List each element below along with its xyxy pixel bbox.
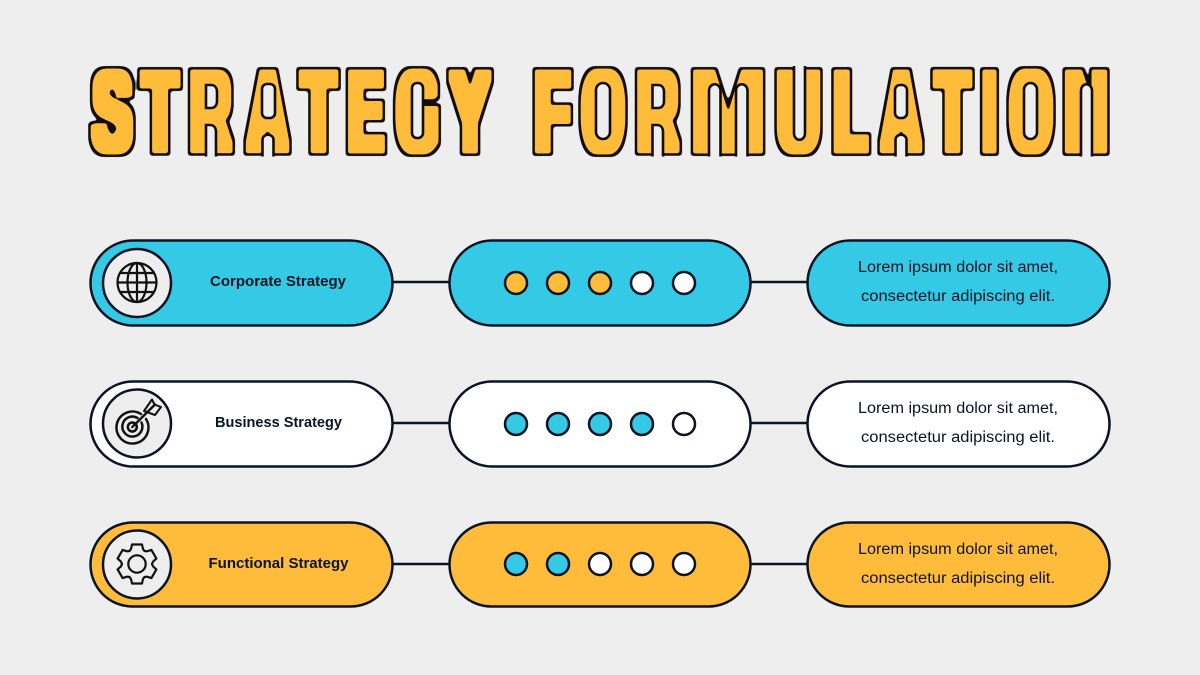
title: A [251, 52, 284, 171]
panel: corporate strategy label [90, 240, 392, 326]
title: U [778, 53, 819, 172]
title: E [350, 54, 381, 171]
panel: corporate description: consectetur adipiscing elit. [861, 288, 1055, 305]
title: T [303, 52, 334, 171]
panel: business rating dots [450, 382, 750, 466]
panel: functional strategy label: Functional Strategy [208, 555, 349, 572]
title: Y [453, 53, 487, 171]
title: T [937, 52, 968, 171]
title: R [638, 52, 677, 171]
icon: target with dart [116, 400, 161, 444]
title: N [1066, 52, 1106, 170]
icon: globe [118, 263, 156, 302]
panel: corporate strategy label: Corporate Strategy [210, 273, 347, 290]
row 2: business strategy [90, 382, 1110, 466]
panel: corporate rating dots [450, 240, 750, 326]
row 3: functional strategy [90, 522, 1110, 606]
panel: corporate description: Lorem ipsum dolor sit amet, [858, 259, 1058, 276]
title: F [536, 51, 568, 171]
panel: business description [808, 382, 1110, 466]
title: O [584, 52, 622, 171]
panel: functional rating dots [450, 522, 750, 606]
panel: functional description: Lorem ipsum dolor sit amet, [858, 541, 1058, 558]
panel: business strategy label: Business Strategy [215, 414, 343, 431]
title: T [144, 52, 176, 171]
panel: functional strategy label [90, 522, 392, 606]
title: R [191, 52, 230, 171]
panel: functional description [808, 522, 1110, 606]
title: I [985, 52, 994, 171]
icon: gear [116, 544, 158, 584]
title: M [691, 52, 765, 171]
title: L [835, 53, 865, 171]
panel: business description: consectetur adipiscing elit. [861, 429, 1055, 446]
title: A [885, 54, 917, 171]
title: O [1012, 52, 1050, 171]
title: G [398, 52, 437, 171]
panel: functional description: consectetur adipiscing elit. [861, 570, 1055, 587]
panel: business strategy label [90, 382, 392, 466]
title: S [94, 53, 130, 171]
panel: business description: Lorem ipsum dolor sit amet, [858, 400, 1058, 417]
title [94, 51, 1106, 172]
row 1: corporate strategy [90, 240, 1110, 326]
panel: corporate description [808, 240, 1110, 326]
